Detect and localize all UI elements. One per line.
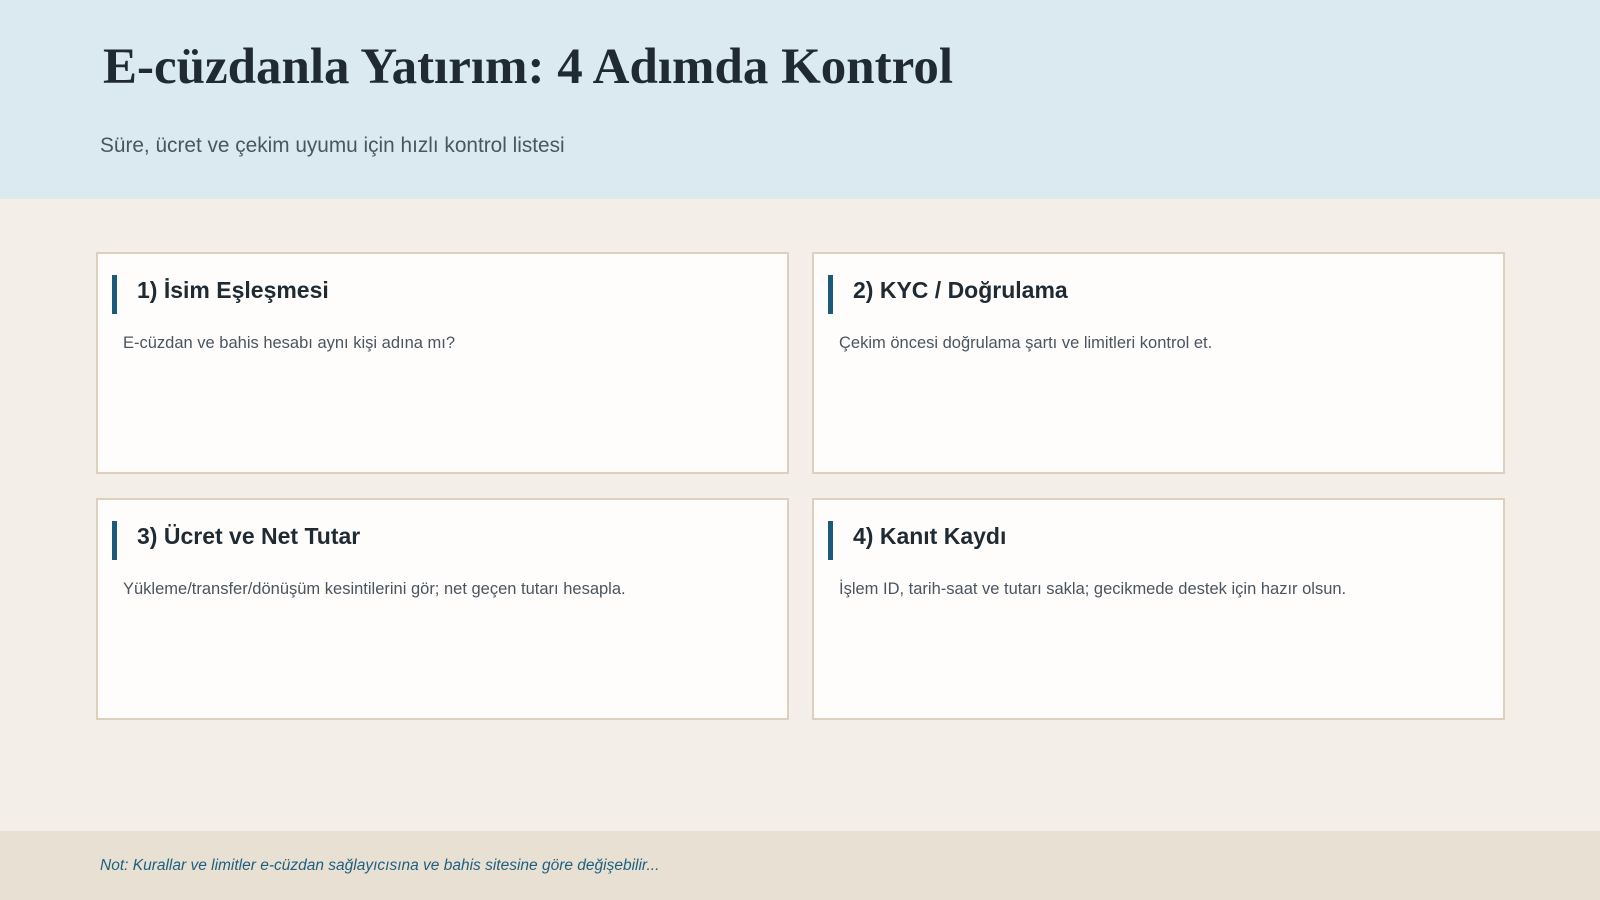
accent bar [828,275,833,314]
panel: step 1 [96,252,789,474]
subtitle: Süre, ücret ve çekim uyumu için hızlı kontrol listesi [100,134,565,157]
header band [0,0,1600,199]
text: E-cüzdan ve bahis hesabı aynı kişi adına mı? [123,334,455,352]
accent bar [828,521,833,560]
heading: 3) Ücret ve Net Tutar [137,523,360,549]
accent bar [112,275,117,314]
panel: step 3 [96,498,789,720]
panel: step 4 [812,498,1505,720]
footer [0,831,1600,900]
footnote: Not: Kurallar ve limitler e-cüzdan sağlayıcısına ve bahis sitesine göre değişebilir... [100,857,659,874]
text: İşlem ID, tarih-saat ve tutarı sakla; gecikmede destek için hazır olsun. [839,580,1346,598]
accent bar [112,521,117,560]
text: Çekim öncesi doğrulama şartı ve limitleri kontrol et. [839,334,1212,352]
title: E-cüzdanla Yatırım: 4 Adımda Kontrol [103,39,953,95]
panel: step 2 [812,252,1505,474]
heading: 4) Kanıt Kaydı [853,523,1006,549]
heading: 2) KYC / Doğrulama [853,277,1068,303]
text: Yükleme/transfer/dönüşüm kesintilerini gör; net geçen tutarı hesapla. [123,580,626,598]
heading: 1) İsim Eşleşmesi [137,277,329,303]
